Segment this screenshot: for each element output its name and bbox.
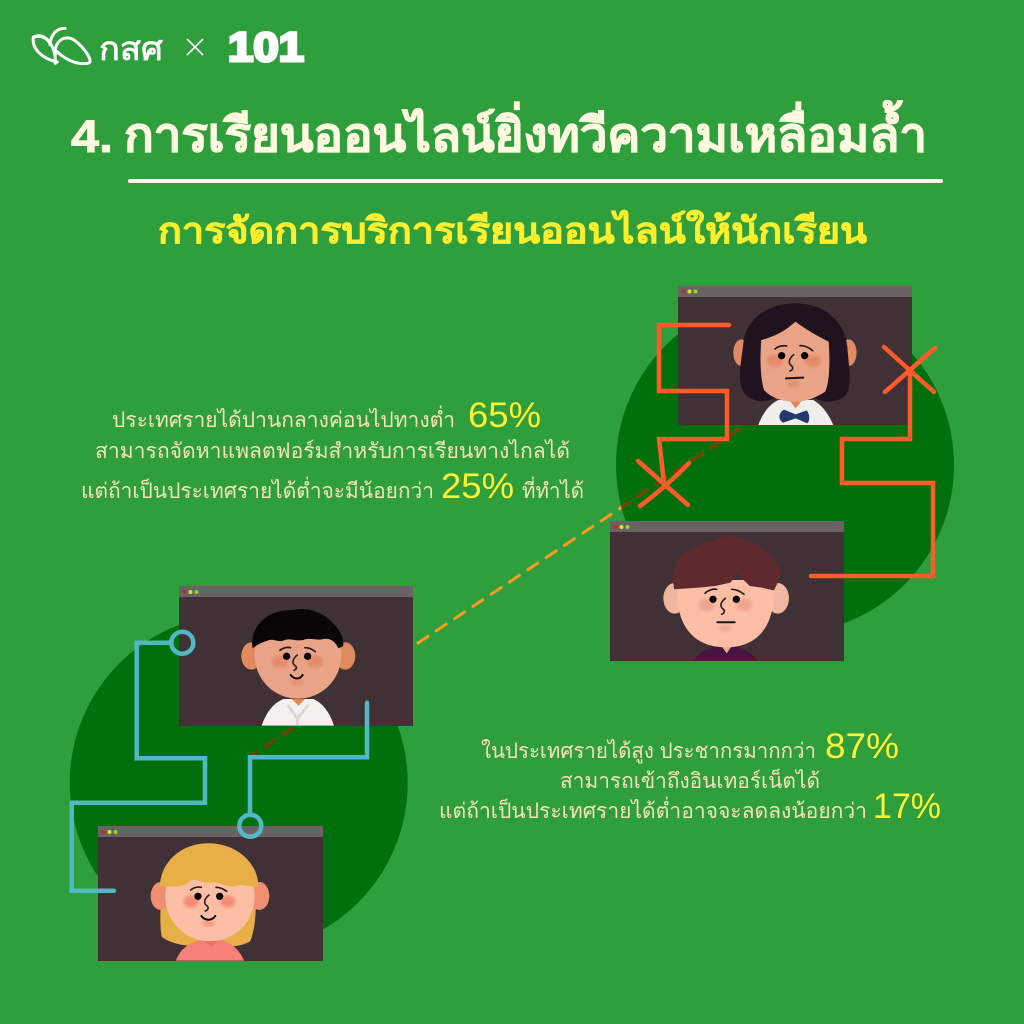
- text block: platform statistics: ประเทศรายได้ปานกลางค่อนไปทางต่ำ: [112, 405, 455, 432]
- text block: platform statistics: ที่ทำได้: [522, 476, 584, 503]
- window: boy with brown hair: [610, 521, 844, 661]
- logo name: กสศ: [99, 30, 163, 67]
- arrow: broken orange connections: [638, 325, 935, 576]
- text block: platform statistics: 65%: [468, 396, 541, 435]
- logo: organisation mark and names: [33, 24, 304, 70]
- subtitle: การจัดการบริการเรียนออนไลน์ให้นักเรียน: [158, 209, 867, 251]
- 101 logo: 101: [228, 24, 304, 70]
- text block: platform statistics: สามารถจัดหาแพลตฟอร์มสำหรับการเรียนทางไกลได้: [95, 439, 570, 463]
- title: การเรียนออนไลน์ยิ่งทวีความเหลื่อมล้ำ: [124, 100, 927, 161]
- text block: internet statistics: 87%: [825, 727, 899, 766]
- title rule: [128, 179, 943, 183]
- text block: internet statistics: แต่ถ้าเป็นประเทศรายได้ต่ำอาจจะลดลงน้อยกว่า: [439, 796, 867, 823]
- character: girl: [733, 303, 857, 425]
- window: girl with dark bob: [678, 286, 912, 425]
- text block: platform statistics: 25%: [441, 467, 514, 506]
- icon: leaf logo: [33, 28, 90, 64]
- character: boy black hair: [241, 609, 355, 726]
- arrow: connected teal lines: [72, 632, 367, 891]
- text block: internet statistics: [439, 727, 941, 826]
- text block: platform statistics: [81, 396, 584, 506]
- cross sign: [187, 39, 203, 55]
- character: blonde girl: [151, 843, 269, 961]
- window: smiling boy: [179, 586, 413, 726]
- text block: internet statistics: ในประเทศรายได้สูง ประชากรมากกว่า: [481, 739, 816, 764]
- character: boy brown hair: [663, 537, 789, 661]
- text block: internet statistics: สามารถเข้าถึงอินเทอร์เน็ตได้: [560, 767, 820, 793]
- panel: background circles: [70, 296, 954, 952]
- text block: internet statistics: 17%: [873, 787, 941, 826]
- window: smiling blonde girl: [98, 826, 323, 961]
- title: 4.: [71, 111, 113, 162]
- dashed connector: [252, 425, 745, 755]
- text block: platform statistics: แต่ถ้าเป็นประเทศรายได้ต่ำจะมีน้อยกว่า: [81, 476, 434, 503]
